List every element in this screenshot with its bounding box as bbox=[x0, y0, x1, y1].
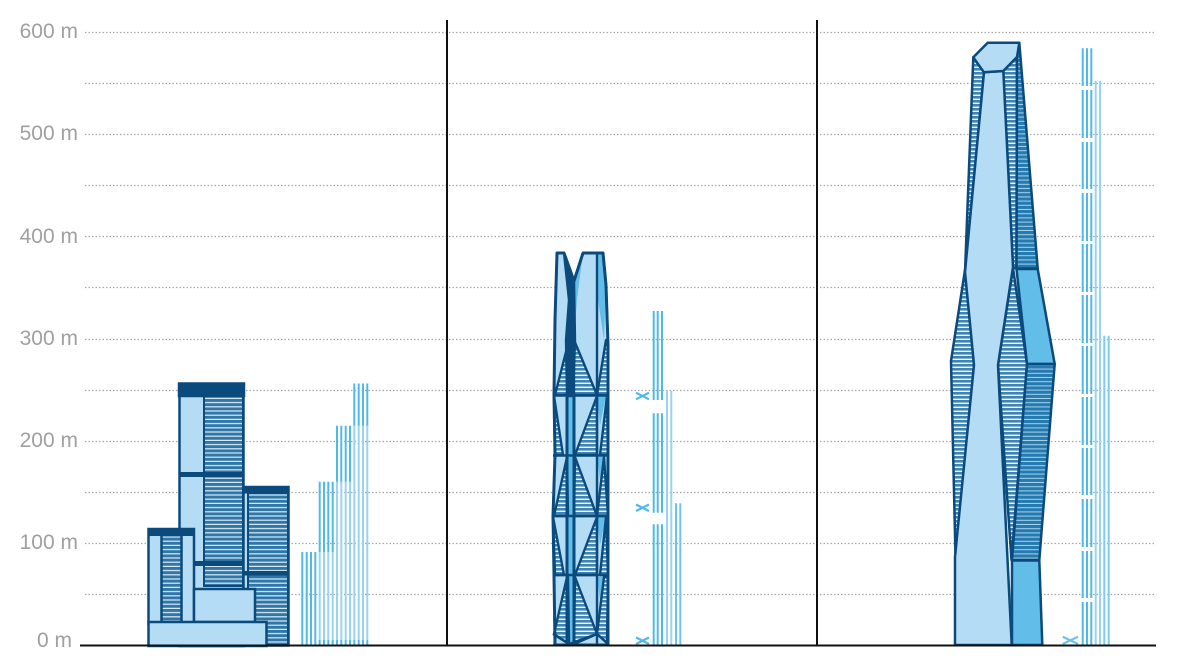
upper podium bbox=[194, 589, 255, 622]
y axis labels bbox=[20, 20, 78, 652]
y axis labels: 400 m bbox=[20, 225, 78, 248]
left tower bbox=[148, 529, 194, 624]
base blue facet bbox=[1012, 560, 1042, 645]
far right dark hatched facet bbox=[1016, 43, 1038, 269]
tower group 3: tallest tower bbox=[951, 43, 1055, 645]
lower dark hatched facet bbox=[1012, 364, 1055, 560]
lower podium bbox=[148, 622, 266, 646]
floor bands bbox=[553, 253, 608, 645]
y axis labels: 200 m bbox=[20, 429, 78, 452]
base chevrons bbox=[553, 634, 607, 644]
main light face bbox=[955, 71, 1013, 645]
left lens hatched facet bbox=[951, 270, 974, 557]
tower body bbox=[553, 253, 608, 645]
sky lobby markers bbox=[636, 393, 649, 644]
y axis labels: 500 m bbox=[20, 122, 78, 145]
y axis labels: 0 m bbox=[37, 629, 72, 652]
baseline bbox=[80, 644, 1156, 646]
main tower bbox=[179, 384, 244, 646]
tower group 1: floor line diagram bbox=[302, 384, 367, 645]
left upper hatched facet bbox=[965, 57, 984, 272]
y axis labels: 300 m bbox=[20, 327, 78, 350]
central column bbox=[567, 396, 574, 645]
dark central wedge bbox=[564, 253, 575, 396]
y axis labels: 600 m bbox=[20, 20, 78, 43]
y axis labels: 100 m bbox=[20, 531, 78, 554]
sky lobby marker bbox=[1063, 637, 1078, 644]
right upper hatched facet bbox=[1003, 57, 1017, 268]
tower group 2: faceted tower bbox=[553, 253, 608, 646]
right tower bbox=[243, 487, 289, 646]
blue side strips bbox=[567, 253, 606, 646]
tower group 1: stepped blocks bbox=[148, 384, 289, 646]
hatched facets bbox=[553, 340, 608, 644]
tower group 3: floor line diagram bbox=[1063, 48, 1109, 645]
upper blue facet bbox=[1016, 269, 1055, 364]
tower group 2: floor line diagram bbox=[636, 311, 680, 645]
outline bbox=[553, 253, 608, 645]
crown bbox=[973, 43, 1019, 72]
right lens hatched facet bbox=[998, 268, 1027, 560]
